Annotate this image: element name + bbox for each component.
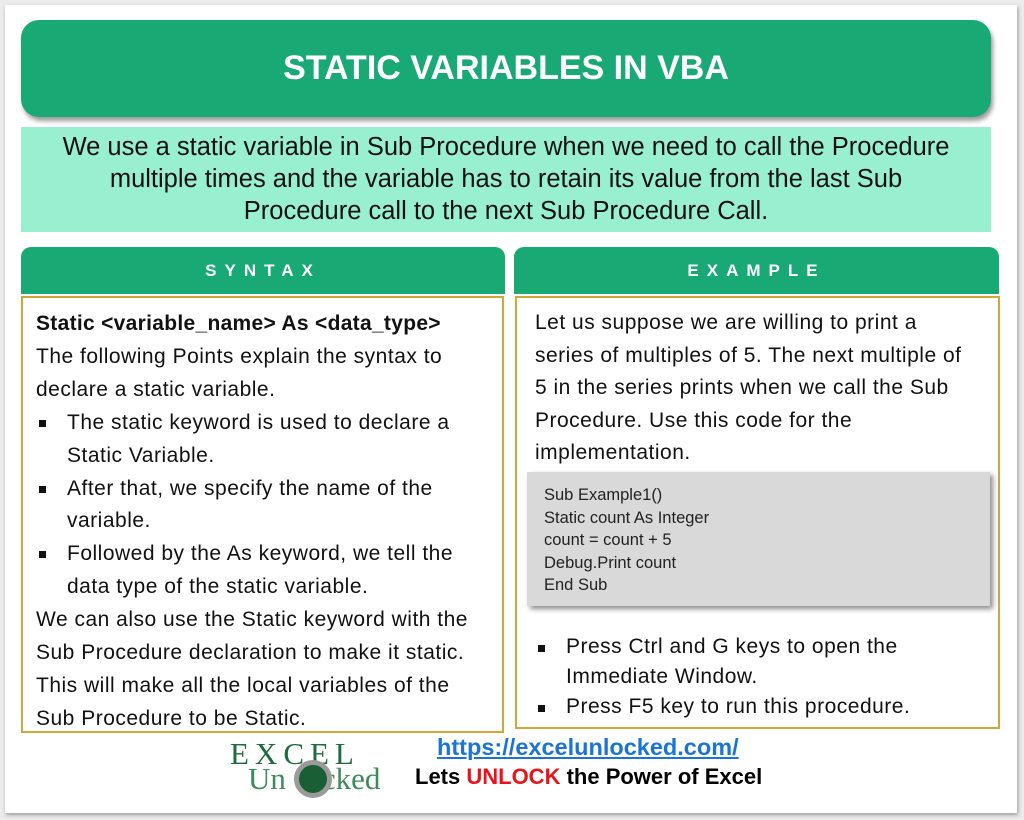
example panel	[515, 296, 1000, 729]
syntax panel: declare a static variable.	[36, 378, 275, 401]
syntax panel: Static <variable_name> As <data_type>	[36, 312, 441, 335]
code box	[527, 472, 990, 606]
link and tagline: https://excelunlocked.com/	[437, 734, 739, 760]
description: multiple times and the variable has to retain its value from the last Sub	[110, 165, 902, 193]
example panel: series of multiples of 5. The next multiple of	[535, 344, 961, 367]
syntax panel	[21, 296, 504, 733]
syntax panel: We can also use the Static keyword with the	[36, 608, 468, 631]
syntax panel: Static Variable.	[67, 444, 215, 467]
logo	[230, 736, 380, 798]
example panel: Press Ctrl and G keys to open the	[566, 635, 898, 658]
description: Procedure call to the next Sub Procedure Call.	[244, 197, 768, 225]
code box: count = count + 5	[544, 531, 672, 549]
example panel: Press F5 key to run this procedure.	[566, 695, 910, 718]
syntax panel: This will make all the local variables of the	[36, 674, 450, 697]
title: STATIC VARIABLES IN VBA	[283, 49, 729, 87]
syntax panel: data type of the static variable.	[67, 575, 368, 598]
example header: EXAMPLE	[687, 260, 826, 280]
syntax panel: The following Points explain the syntax to	[36, 345, 442, 368]
syntax header: SYNTAX	[205, 260, 321, 280]
example header	[514, 247, 999, 294]
example panel: Immediate Window.	[566, 665, 758, 688]
icon: lock	[294, 760, 332, 798]
syntax panel: Sub Procedure declaration to make it static.	[36, 641, 464, 664]
example panel: implementation.	[535, 441, 691, 464]
example panel: 5 in the series prints when we call the Sub	[535, 376, 949, 399]
syntax header	[21, 247, 505, 294]
title	[21, 20, 991, 117]
example panel: Let us suppose we are willing to print a	[535, 311, 917, 334]
link and tagline: Lets UNLOCK the Power of Excel	[415, 764, 762, 789]
syntax panel: variable.	[67, 509, 151, 532]
code box: End Sub	[544, 576, 607, 594]
logo: EXCEL	[230, 736, 360, 771]
example panel: Procedure. Use this code for the	[535, 409, 852, 432]
code box: Debug.Print count	[544, 554, 676, 572]
syntax panel: Sub Procedure to be Static.	[36, 707, 306, 730]
code box: Sub Example1()	[544, 486, 662, 504]
logo: Un cked	[248, 761, 380, 796]
description: We use a static variable in Sub Procedure when we need to call the Procedure	[63, 133, 949, 161]
syntax panel: After that, we specify the name of the	[67, 477, 433, 500]
syntax panel: Followed by the As keyword, we tell the	[67, 542, 453, 565]
link and tagline	[415, 734, 762, 789]
description	[21, 127, 991, 232]
syntax panel: The static keyword is used to declare a	[67, 411, 450, 434]
code box: Static count As Integer	[544, 508, 709, 526]
